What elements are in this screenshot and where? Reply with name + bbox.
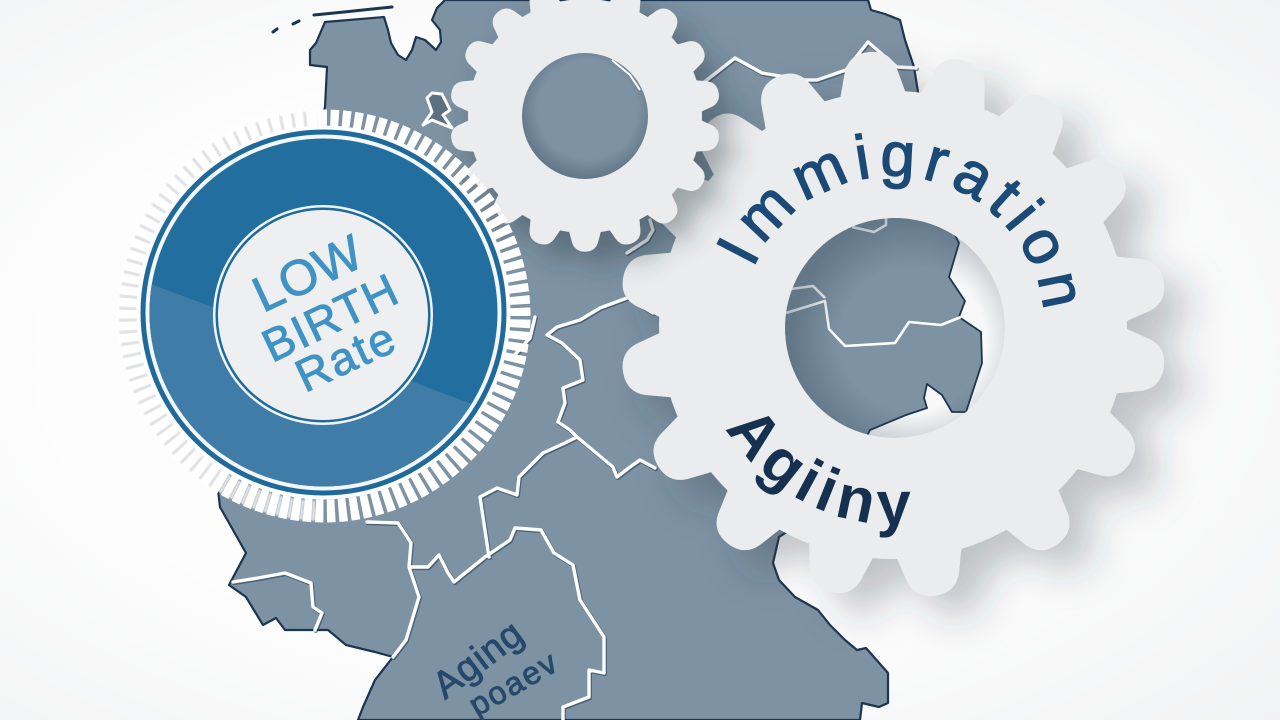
- large gear: [622, 52, 1206, 634]
- outer dark rim: [140, 130, 506, 496]
- gear hole showing map: [785, 218, 1005, 438]
- gear label immigration: Immigration: [716, 132, 1076, 308]
- faint tick shadows on the background: [118, 112, 315, 522]
- white tick ring: [129, 121, 519, 511]
- aging label: [425, 612, 565, 720]
- gear label agiiny: Agiiny: [726, 416, 910, 538]
- state borders: [233, 42, 917, 720]
- islands in the north sea: [273, 7, 392, 32]
- badge text: [244, 224, 407, 402]
- small gear hole: [522, 53, 648, 179]
- blue disc: [150, 138, 498, 486]
- small gear body and teeth: [449, 0, 721, 252]
- badge text: LOW: [244, 224, 372, 323]
- gear body and teeth: [617, 49, 1169, 601]
- inner dark ring: [216, 208, 430, 422]
- dark ticks over the gear: [462, 174, 508, 241]
- inner disc: [218, 210, 428, 420]
- badge text: Rate: [287, 310, 405, 402]
- lake outline: [423, 93, 452, 128]
- small gear: [449, 0, 721, 252]
- white backing: [136, 126, 510, 500]
- badge text: BIRTH: [254, 263, 407, 372]
- low birth rate badge: [127, 119, 521, 513]
- map of Germany: [218, 0, 960, 720]
- lighter lower section: [150, 284, 472, 486]
- map landmass: [218, 0, 960, 720]
- inner white outline: [213, 205, 433, 425]
- aging label: Aging: [425, 612, 532, 707]
- white rim: [146, 134, 502, 490]
